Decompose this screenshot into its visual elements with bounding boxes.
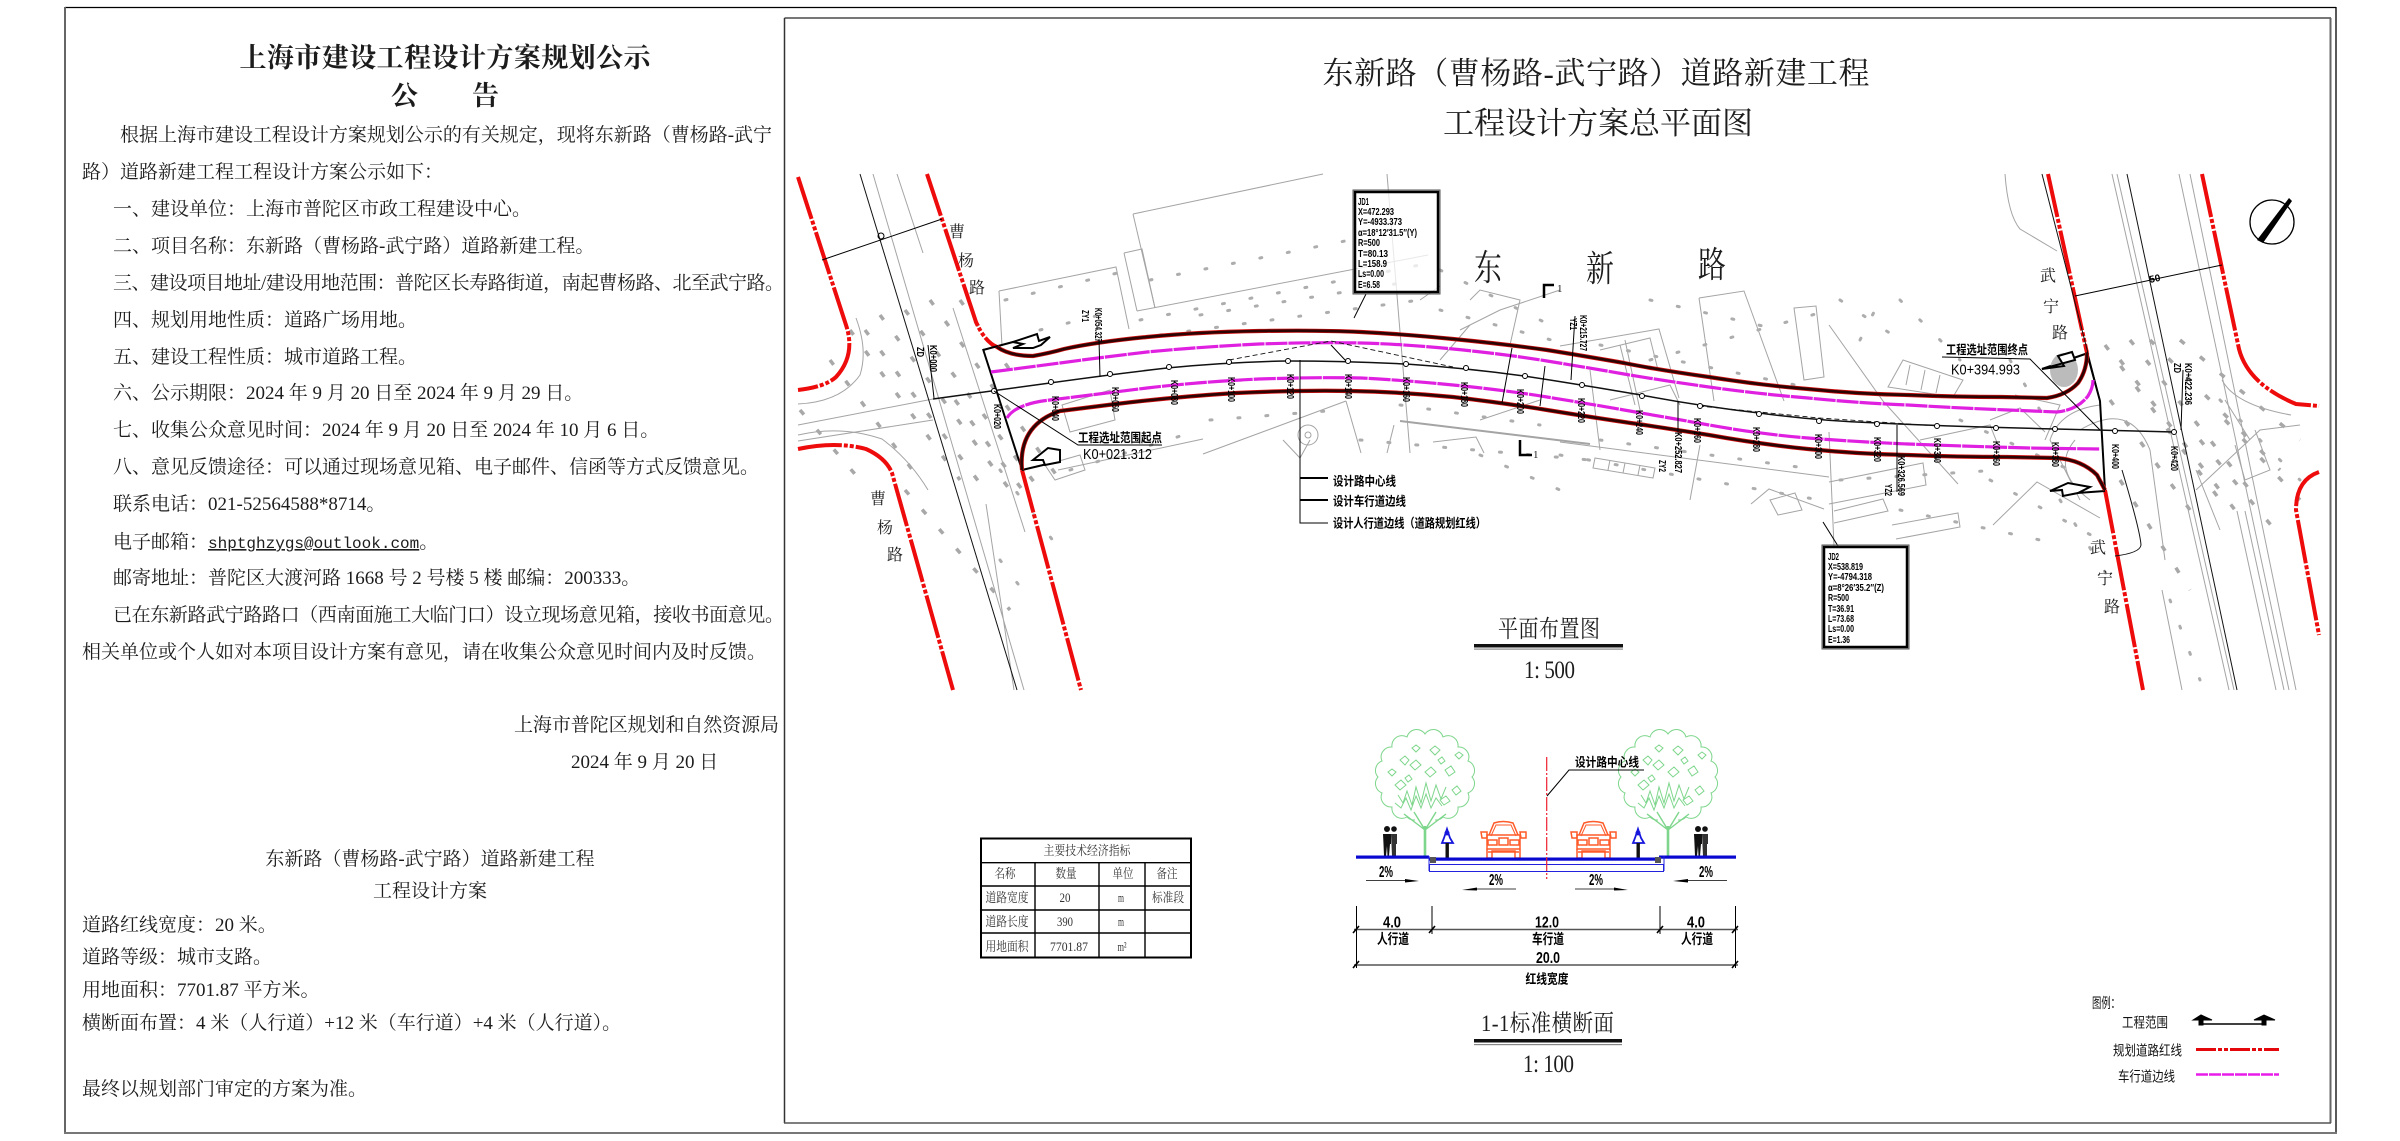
- callout: JD2 curve data: Y=-4794.318: [1828, 572, 1872, 583]
- arrow: start north section mark: [1013, 334, 1050, 348]
- labels: station numbers: K0+220: [1575, 398, 1586, 423]
- text block: scheme details: 用地面积：7701.87 平方米。: [82, 979, 320, 1001]
- callout: JD1 curve data: R=500: [1358, 238, 1380, 249]
- road surface: [1356, 856, 1736, 872]
- labels: station numbers: YZ1: [1567, 318, 1578, 330]
- heading: cross section title: 1-1标准横断面: [1481, 1010, 1614, 1036]
- labels: dimension values: 20.0: [1536, 950, 1560, 967]
- table: main technical indicators: m: [1118, 890, 1124, 905]
- text block: scheme details: 最终以规划部门审定的方案为准。: [82, 1078, 367, 1100]
- callout: JD1 curve data: JD1: [1358, 197, 1369, 208]
- callout: JD2 curve data: R=500: [1828, 593, 1849, 604]
- road: northern pavement edge: [997, 331, 2087, 398]
- labels: station numbers: [914, 308, 2193, 496]
- table: main technical indicators: 20: [1060, 890, 1070, 905]
- label: section mark top: [1544, 283, 1562, 298]
- callout: end of project: [1942, 342, 2100, 430]
- callout: start of project: [994, 391, 1162, 463]
- text block: notice body: 邮寄地址：普陀区大渡河路 1668 号 2 号楼 5 楼 邮编：200333。: [113, 566, 640, 589]
- labels: station numbers: K0+400: [2109, 444, 2120, 469]
- chart: cross section: [1353, 730, 1738, 986]
- legend: [2092, 995, 2279, 1084]
- road: southern pavement edge: [1022, 391, 2105, 490]
- arrow: end south section mark: [2050, 483, 2090, 496]
- labels: station numbers: K0+360: [1990, 441, 2001, 466]
- labels: dimension values: 人行道: [1681, 931, 1713, 947]
- legend heading: 图例：: [2092, 995, 2120, 1011]
- text block: scheme details: 道路红线宽度：20 米。: [82, 914, 277, 936]
- labels: road names: 新: [1586, 249, 1614, 289]
- table: main technical indicators: 主要技术经济指标: [1044, 843, 1131, 858]
- callout: JD1 curve data: [1353, 190, 1440, 318]
- labels: road names: 东: [1474, 248, 1502, 288]
- decoration: section title rule: [1474, 1039, 1622, 1045]
- label: plan scale: 1: 500: [1524, 656, 1575, 685]
- table: main technical indicators: 标准段: [1152, 890, 1184, 905]
- table: main technical indicators: 390: [1057, 914, 1073, 929]
- table: main technical indicators: 道路宽度: [986, 890, 1028, 905]
- text block: notice body: 电子邮箱：shptghzygs@outlook.com。: [113, 531, 438, 553]
- legend: project extent: [2122, 1014, 2275, 1030]
- labels: station numbers: K0+054.327: [1092, 308, 1103, 342]
- road: project boundary lines: [983, 342, 2105, 493]
- labels: station numbers: K0+240: [1633, 410, 1644, 435]
- text block: issue date: 2024 年 9 月 20 日: [571, 751, 718, 773]
- heading: drawing title: 东新路（曹杨路-武宁路）道路新建工程: [1322, 56, 1870, 91]
- text block: scheme details: 道路等级：城市支路。: [82, 946, 272, 968]
- labels: station numbers: K0+320: [1871, 437, 1882, 462]
- text block: notice body: 四、规划用地性质：道路广场用地。: [113, 309, 417, 331]
- background: buildings and kerbs: [798, 174, 2300, 690]
- labels: station numbers: K0+422.236: [2182, 363, 2193, 405]
- background: trees and survey marks: [800, 240, 2300, 680]
- icon: left tree: [1375, 730, 1475, 857]
- text block: issuing authority: 上海市普陀区规划和自然资源局: [514, 714, 779, 736]
- callout: JD1 curve data: L=158.9: [1358, 259, 1387, 270]
- icon: north arrow: [2250, 198, 2294, 244]
- road: design centre line: [933, 341, 2176, 434]
- panel: drawing frame: [784, 18, 2331, 1123]
- callout: design centre line: 设计路中心线: [1575, 754, 1639, 770]
- table: main technical indicators: 道路长度: [986, 914, 1028, 929]
- labels: station numbers: K0+280: [1750, 427, 1761, 452]
- text block: notice body: [82, 124, 784, 663]
- table: main technical indicators: 数量: [1056, 866, 1076, 881]
- labels: station numbers: ZY2: [1656, 460, 1667, 472]
- labels: station numbers: K0+260: [1691, 418, 1702, 443]
- text block: scheme details: 横断面布置：4 米（人行道）+12 米（车行道）+4 米（人行道）。: [82, 1012, 621, 1034]
- text block: notice body: 八、意见反馈途径：可以通过现场意见箱、电子邮件、信函等方式反馈意见。: [113, 456, 759, 478]
- text block: notice body: 七、收集公众意见时间：2024 年 9 月 20 日至 2024 年 10 月 6 日。: [113, 419, 659, 441]
- heading: design scheme: 工程设计方案: [373, 880, 487, 902]
- labels: station numbers: K0+326.569: [1895, 456, 1906, 496]
- leaders: station ticks: [928, 316, 2183, 492]
- labels: station numbers: K0+100: [1225, 377, 1236, 402]
- table: main technical indicators: 备注: [1156, 866, 1178, 881]
- labels: station numbers: YZ2: [1882, 484, 1893, 496]
- labels: station numbers: K0+180: [1458, 382, 1469, 407]
- road: northern carriageway edge: [991, 343, 2093, 412]
- callout: JD2 curve data: [1822, 522, 1909, 649]
- callout: JD2 curve data: T=36.91: [1828, 604, 1854, 615]
- labels: road names: 路: [1698, 245, 1726, 285]
- legend: project extent: 工程范围: [2122, 1014, 2168, 1030]
- labels: station numbers: K0+160: [1400, 377, 1411, 402]
- callout: JD1 curve data: Y=-4933.373: [1358, 217, 1402, 228]
- callout: JD1 curve data: α=18°12′31.5″(Y): [1358, 228, 1417, 239]
- callout: line type notes: 设计人行道边线（道路规划红线）: [1333, 516, 1486, 530]
- table: main technical indicators: m: [1118, 914, 1124, 929]
- dimension: Wuning Road width: 50: [2148, 273, 2162, 286]
- labels: station numbers: K0+252.827: [1672, 432, 1683, 473]
- callout: JD2 curve data: JD2: [1828, 552, 1839, 563]
- labels: cross slopes: 2%: [1489, 872, 1503, 889]
- table: main technical indicators: [981, 838, 1191, 958]
- labels: station numbers: K0+200: [1514, 389, 1525, 414]
- labels: station numbers: ZY1: [1079, 310, 1090, 322]
- text block: notice body: 六、公示期限：2024 年 9 月 20 日至 2024 年 9 月 29 日。: [113, 382, 583, 404]
- icon: right cyclist: [1633, 829, 1644, 858]
- icon: left car: [1481, 822, 1526, 858]
- labels: dimension values: 4.0: [1383, 914, 1401, 932]
- labels: dimension values: 4.0: [1687, 914, 1705, 932]
- labels: road names: 曹: [870, 490, 886, 508]
- table: main technical indicators: m²: [1118, 939, 1127, 954]
- text block: notice body: 联系电话：021-52564588*8714。: [113, 493, 385, 515]
- table: main technical indicators: 用地面积: [986, 939, 1029, 954]
- labels: road names: 路: [2104, 598, 2120, 616]
- labels: road names: 杨: [958, 252, 974, 270]
- callout: JD1 curve data: E=6.58: [1358, 280, 1380, 291]
- callout: end of project: 工程选址范围终点: [1946, 342, 2028, 357]
- heading: project scheme: 东新路（曹杨路-武宁路）道路新建工程: [265, 848, 595, 870]
- table: main technical indicators: 7701.87: [1050, 939, 1088, 954]
- labels: cross slopes: 2%: [1699, 864, 1713, 881]
- labels: station numbers: K0+000: [927, 345, 938, 372]
- labels: station numbers: K0+215.727: [1577, 315, 1588, 351]
- road: thin centre lines of crossing streets: [860, 174, 2237, 690]
- callout: JD1 curve data: T=80.13: [1358, 249, 1388, 260]
- labels: station numbers: K0+040: [1049, 396, 1060, 421]
- heading: announcement: 公 告: [391, 81, 499, 111]
- labels: cross slopes: 2%: [1589, 872, 1603, 889]
- dimension: Wuning Road width: [2075, 265, 2222, 296]
- labels: cross slopes: 2%: [1379, 864, 1393, 881]
- labels: station numbers: K0+060: [1109, 387, 1120, 412]
- labels: station numbers: K0+380: [2049, 442, 2060, 467]
- arrow: end north section mark: [2042, 352, 2078, 387]
- labels: station numbers: K0+340: [1931, 438, 1942, 463]
- text block: notice body: 相关单位或个人如对本项目设计方案有意见，请在收集公众意见时间内及时反馈。: [82, 641, 766, 663]
- label: section scale: 1: 100: [1523, 1050, 1574, 1079]
- icon: right tree: [1618, 730, 1718, 857]
- road: southern carriageway edge: [1007, 378, 2100, 449]
- label: section mark bottom: 1: [1533, 449, 1538, 461]
- dimension: Caoyang Road width: [822, 219, 942, 260]
- labels: station numbers: K0+080: [1168, 380, 1179, 405]
- labels: dimension values: 红线宽度: [1526, 972, 1568, 986]
- text block: notice body: 路）道路新建工程工程设计方案公示如下：: [82, 161, 443, 183]
- callout: start of project: 工程选址范围起点: [1078, 430, 1162, 445]
- arrow: start south section mark: [1033, 448, 1060, 465]
- labels: cross slopes: [1366, 864, 1727, 890]
- labels: dimension values: [1377, 914, 1713, 986]
- callout: JD2 curve data: α=8°26′35.2″(Z): [1828, 583, 1884, 594]
- text block: notice body: 根据上海市建设工程设计方案规划公示的有关规定，现将东新路（曹杨路-武宁: [120, 124, 772, 146]
- labels: station numbers: K0+020: [991, 404, 1002, 429]
- labels: road names: 武: [2090, 539, 2106, 557]
- callout: JD2 curve data: L=73.68: [1828, 614, 1854, 625]
- callout: end of project: K0+394.993: [1951, 362, 2020, 378]
- labels: road names: 路: [887, 546, 903, 564]
- labels: road names: 武: [2040, 267, 2056, 285]
- text block: scheme details: [82, 914, 621, 1100]
- callout: start of project: K0+021.312: [1083, 446, 1152, 463]
- labels: station numbers: K0+120: [1284, 374, 1295, 399]
- heading: plan title: 平面布置图: [1498, 615, 1600, 642]
- callout: JD1 curve data: X=472.293: [1358, 207, 1394, 218]
- icon: right car: [1571, 822, 1616, 858]
- labels: road names: [870, 223, 2120, 616]
- labels: road names: 宁: [2043, 298, 2059, 316]
- dimension lines: [1353, 906, 1738, 968]
- table: main technical indicators: 名称: [994, 866, 1016, 881]
- icon: left cyclist: [1442, 829, 1453, 858]
- text block: notice body: 三、建设项目地址/建设用地范围：普陀区长寿路街道，南起曹杨路、北至武宁路。: [113, 272, 784, 294]
- text block: notice body: 一、建设单位：上海市普陀区市政工程建设中心。: [113, 198, 531, 220]
- labels: road names: 曹: [949, 223, 965, 241]
- labels: station numbers: K0+420: [2168, 446, 2179, 471]
- heading: drawing subtitle: 工程设计方案总平面图: [1443, 106, 1753, 141]
- panel: public notice: [82, 42, 784, 1100]
- heading: notice title: 上海市建设工程设计方案规划公示: [240, 42, 652, 73]
- callout: line type notes: 设计车行道边线: [1333, 494, 1406, 508]
- text block: notice body: 二、项目名称：东新路（曹杨路-武宁路）道路新建工程。: [113, 235, 594, 257]
- labels: road names: 路: [2052, 324, 2068, 342]
- legend: carriageway edge: 车行道边线: [2118, 1068, 2175, 1084]
- icon: right pedestrians: [1694, 826, 1708, 856]
- icon: left pedestrians: [1383, 826, 1397, 856]
- label: section mark bottom: [1520, 440, 1538, 461]
- callout: JD2 curve data: E=1.36: [1828, 635, 1850, 646]
- callout: JD2 curve data: Ls=0.00: [1828, 624, 1854, 635]
- text block: notice body: 五、建设工程性质：城市道路工程。: [113, 346, 417, 368]
- callout: line type notes: [1300, 360, 1486, 530]
- callout: JD2 curve data: X=538.819: [1828, 562, 1863, 573]
- labels: road names: 路: [969, 279, 985, 297]
- chart: site plan: [798, 174, 2319, 690]
- centre line: [1546, 757, 1548, 879]
- labels: station numbers: K0+300: [1812, 434, 1823, 459]
- callout: line type notes: 设计路中心线: [1333, 474, 1396, 488]
- labels: dimension values: 12.0: [1535, 914, 1559, 932]
- decoration: plan title rule: [1474, 644, 1623, 650]
- callout: JD1 curve data: Ls=0.00: [1358, 269, 1384, 280]
- road: red boundary lines: [798, 174, 2319, 690]
- labels: station numbers: ZD: [2171, 363, 2182, 373]
- labels: road names: 宁: [2097, 570, 2113, 588]
- text block: notice body: 已在东新路武宁路路口（西南面施工大临门口）设立现场意见箱，接收书面意见。: [113, 604, 784, 626]
- table: main technical indicators: 单位: [1112, 866, 1134, 881]
- legend: planned road red line: 规划道路红线: [2113, 1042, 2182, 1058]
- callout: design centre line: [1547, 754, 1644, 796]
- labels: dimension values: 车行道: [1532, 931, 1564, 947]
- labels: dimension values: 人行道: [1377, 931, 1409, 947]
- label: section mark top: 1: [1557, 283, 1562, 295]
- labels: road names: 杨: [877, 519, 893, 537]
- labels: station numbers: ZD: [914, 347, 925, 357]
- labels: station numbers: K0+140: [1342, 374, 1353, 399]
